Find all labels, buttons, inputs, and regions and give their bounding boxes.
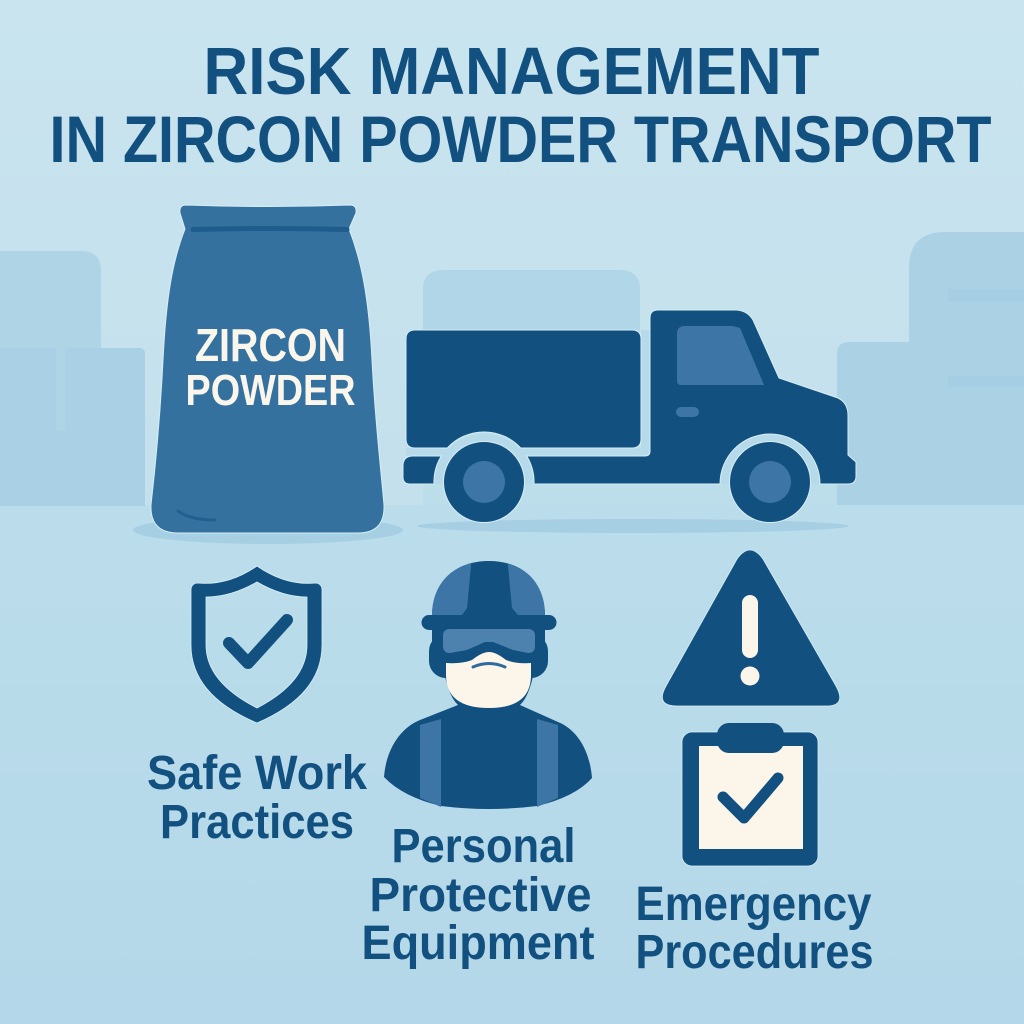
truck cargo box xyxy=(406,330,641,448)
worker ear protection xyxy=(429,634,548,678)
label: personal protective equipment xyxy=(362,820,595,970)
label: safe work practices: Practices xyxy=(160,796,354,849)
truck rear wheel xyxy=(444,442,524,522)
truck door handle xyxy=(676,407,699,417)
helmet brim xyxy=(422,615,556,630)
label: emergency procedures: Procedures xyxy=(636,926,874,979)
label: personal protective equipment: Equipment xyxy=(362,917,595,970)
worker mouth line xyxy=(473,664,505,667)
truck window xyxy=(677,326,764,385)
truck front wheel xyxy=(730,442,810,522)
label: safe work practices xyxy=(147,747,367,849)
icon: warning triangle xyxy=(662,550,840,706)
icon: truck xyxy=(403,310,856,522)
icon: zircon powder bag xyxy=(151,205,384,533)
bag label: POWDER xyxy=(186,366,356,415)
bag label: ZIRCON xyxy=(195,319,346,371)
truck cab and chassis xyxy=(527,310,856,484)
label: personal protective equipment: Personal xyxy=(392,820,576,873)
worker face xyxy=(446,652,531,708)
bag label xyxy=(186,319,356,415)
ground shadow: bag xyxy=(133,516,403,544)
worker goggles xyxy=(443,629,535,653)
title xyxy=(50,34,992,176)
icon: worker with protective equipment xyxy=(384,555,592,809)
icon: shield with check xyxy=(191,566,322,723)
worker neck and jaw xyxy=(432,625,545,716)
truck gaps and wheel arches xyxy=(406,330,820,484)
label: emergency procedures xyxy=(636,878,874,979)
title: RISK MANAGEMENT xyxy=(204,34,820,109)
worker vest straps xyxy=(420,719,558,807)
worker helmet xyxy=(432,561,545,616)
worker body xyxy=(384,705,592,809)
label: personal protective equipment: Protective xyxy=(370,869,592,922)
icon: clipboard with check xyxy=(682,723,818,866)
label: safe work practices: Safe Work xyxy=(147,747,367,800)
helmet highlights xyxy=(432,563,545,615)
label: emergency procedures: Emergency xyxy=(636,878,872,931)
ground shadow: truck xyxy=(417,519,849,533)
truck rear bumper xyxy=(403,456,441,484)
background silhouettes xyxy=(0,232,1024,506)
